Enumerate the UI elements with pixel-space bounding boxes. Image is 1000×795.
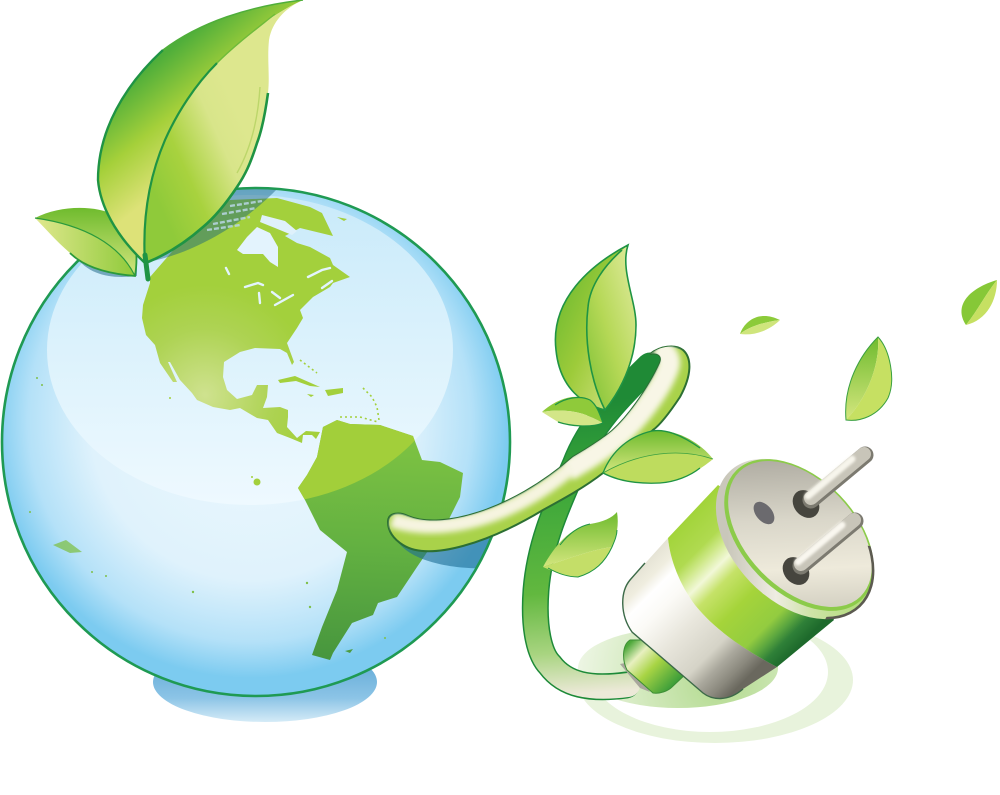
small leaf shadow on globe bbox=[80, 262, 137, 277]
continent: South America bbox=[298, 420, 463, 660]
specks: pacific islands bbox=[29, 377, 386, 639]
neck shadow bbox=[620, 662, 650, 692]
leaf: right on cord bbox=[603, 431, 713, 483]
cord: back loop bbox=[535, 366, 650, 687]
cord: front bbox=[388, 347, 689, 551]
plug body: back band bbox=[623, 538, 777, 699]
plug neck bbox=[624, 640, 690, 693]
leaf: small on cord bbox=[542, 397, 603, 426]
plug body: green band bbox=[668, 485, 834, 667]
plug hole bbox=[750, 498, 778, 528]
globe ground shadow bbox=[153, 642, 377, 722]
globe bbox=[2, 170, 515, 696]
leaf: upper on cord bbox=[555, 245, 636, 410]
plug bbox=[620, 446, 874, 700]
leaf: lower on cord bbox=[543, 512, 618, 577]
leaf: small left bbox=[35, 208, 136, 276]
leaf: floating small bbox=[740, 316, 780, 334]
leaf: large top bbox=[98, 0, 303, 279]
arctic islands in shadow bbox=[207, 201, 262, 230]
caribbean islands bbox=[169, 217, 379, 486]
rim dark edge bbox=[825, 546, 874, 620]
continent: North America bbox=[142, 198, 350, 443]
leaf shadow on globe bbox=[154, 189, 276, 261]
ground glow under plug bbox=[577, 612, 853, 743]
leaf: floating far right bbox=[962, 280, 997, 325]
prong lower bbox=[777, 520, 855, 590]
leaf: floating middle bbox=[846, 337, 892, 420]
plug face bbox=[701, 434, 899, 634]
plug rim bbox=[685, 428, 905, 650]
cord shadow on globe bbox=[399, 538, 490, 568]
prong upper bbox=[787, 454, 865, 523]
